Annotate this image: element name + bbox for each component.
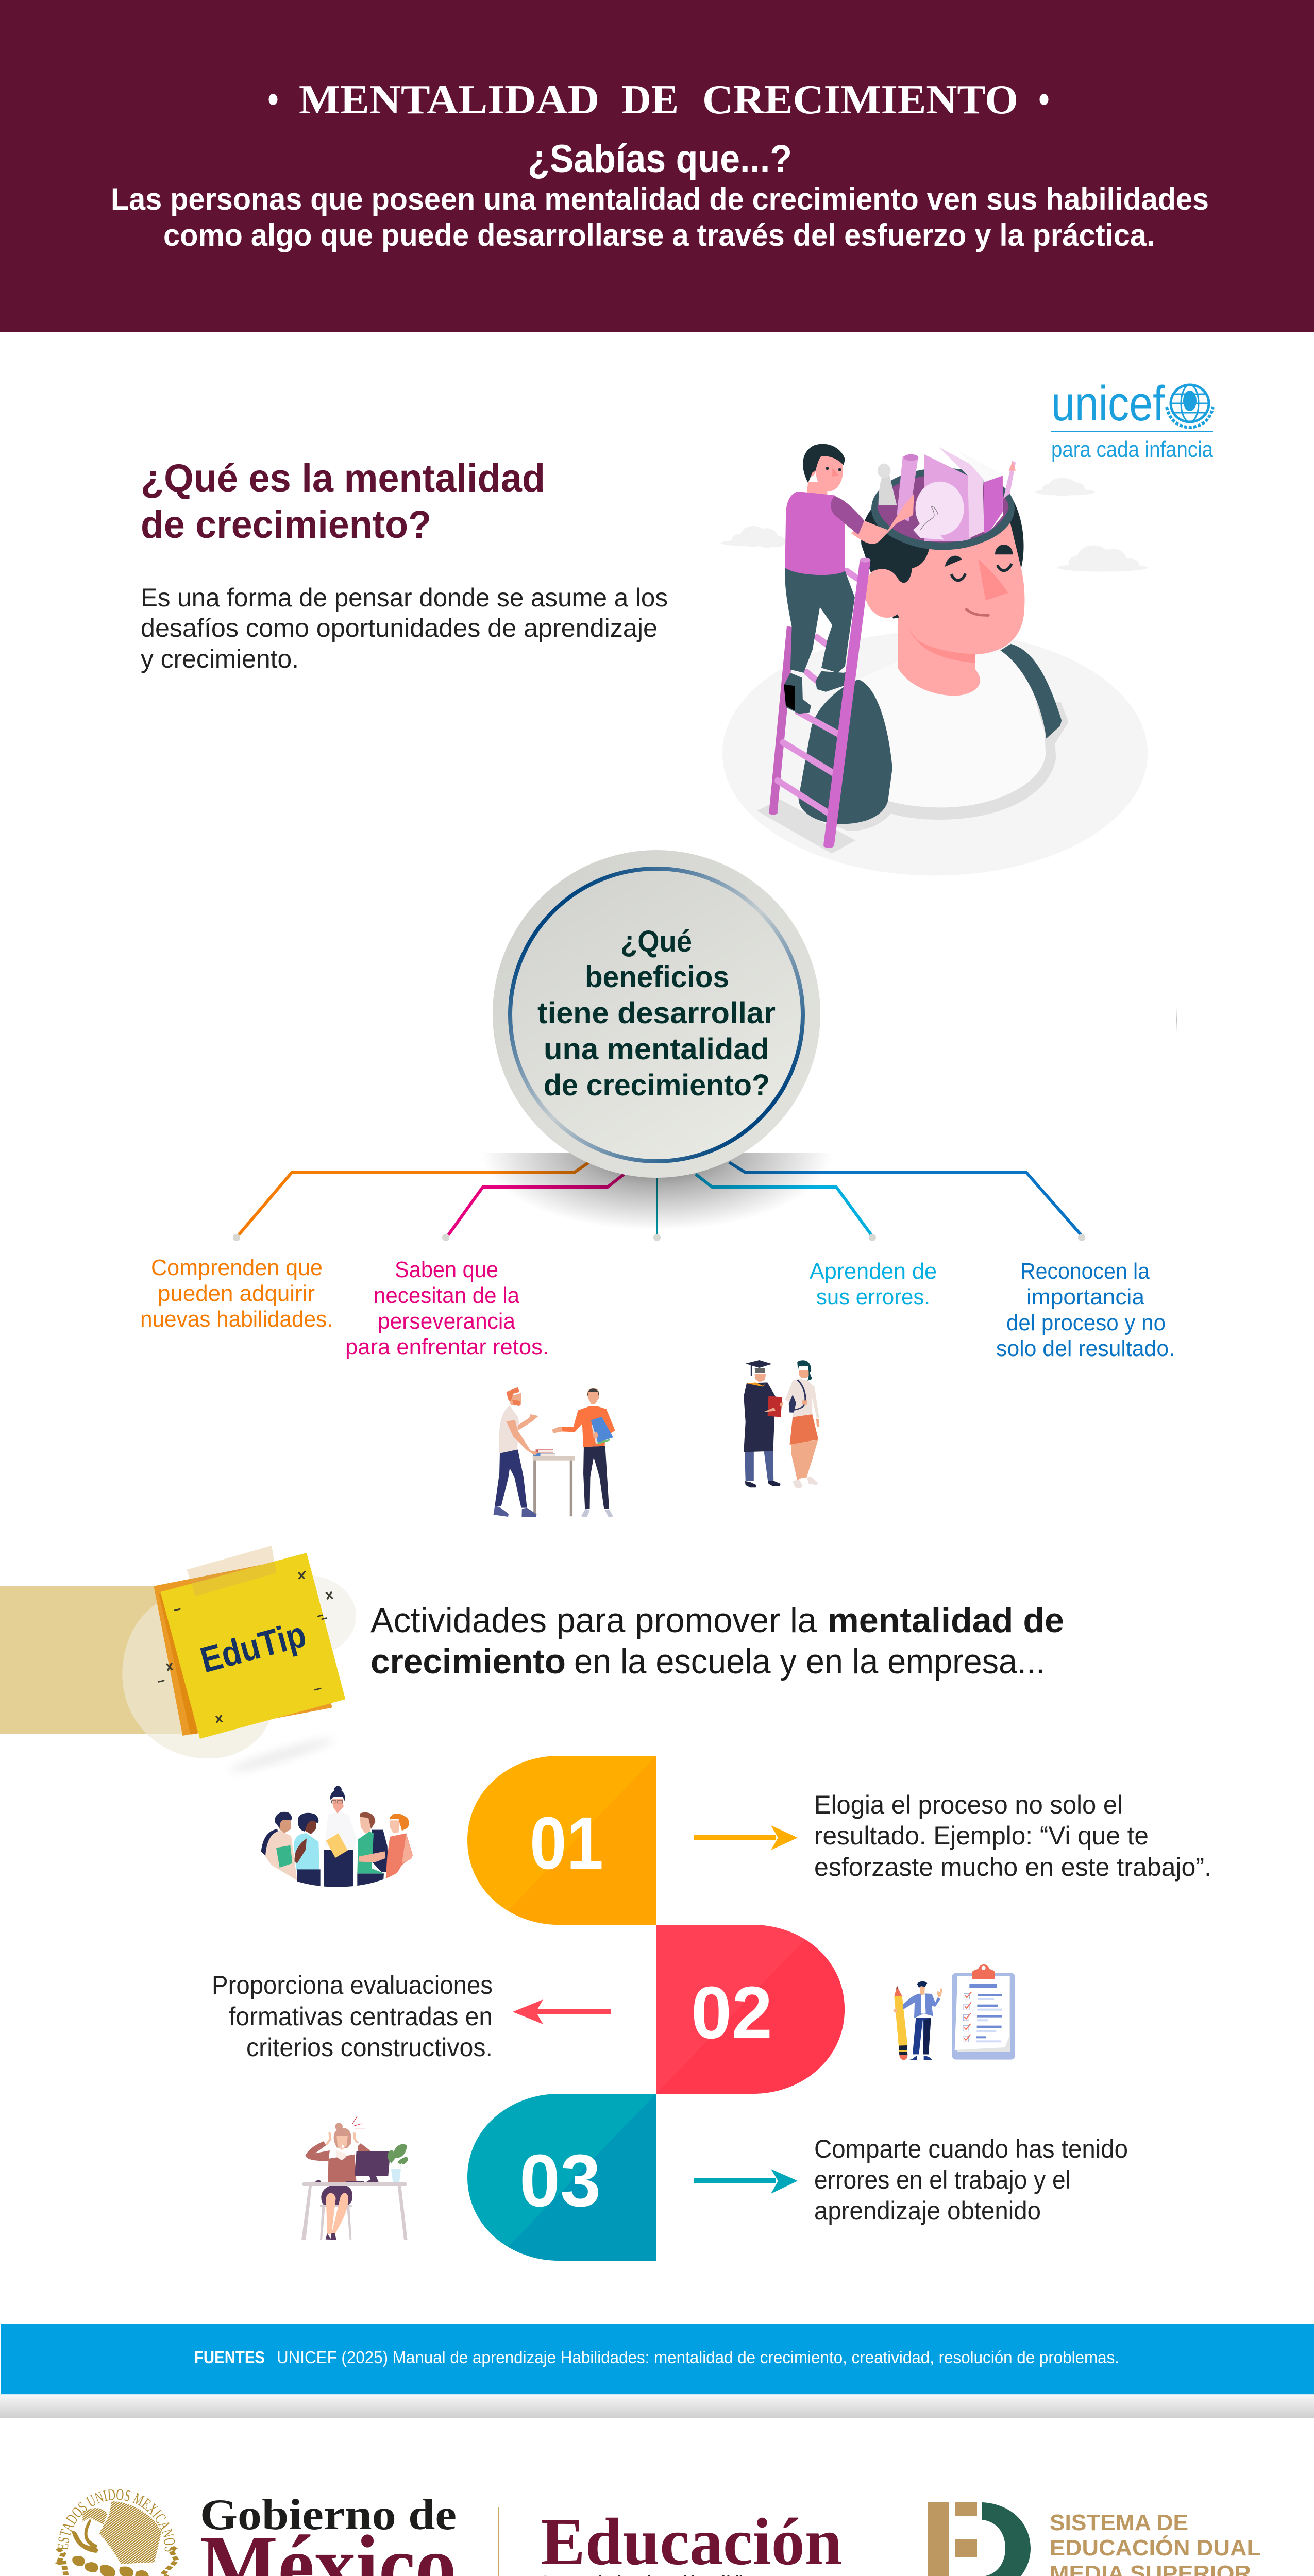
step 2 text: Proporciona evaluaciones (212, 1971, 493, 1999)
benefit 1: Comprenden que (151, 1255, 323, 1280)
benefit 3: sus errores. (816, 1284, 930, 1310)
logo: Sistema de Educación Dual (928, 2502, 1261, 2576)
central disc with question: ¿Qué (620, 925, 692, 958)
disc shadow (482, 1153, 832, 1230)
step 3 text: Comparte cuando has tenido (814, 2134, 1128, 2163)
benefit 3 (810, 1259, 937, 1310)
title: • (1038, 77, 1050, 123)
header band (0, 0, 1314, 332)
step 3 arrow (694, 2169, 798, 2194)
intro text (111, 182, 1209, 252)
central disc with question: beneficios (585, 960, 729, 994)
benefit 4: solo del resultado. (996, 1336, 1175, 1361)
benefit 1: pueden adquirir (158, 1281, 315, 1306)
step 3 text: errores en el trabajo y el (814, 2165, 1071, 2194)
definition text: Es una forma de pensar donde se asume a los (141, 583, 668, 612)
unicef logo (1051, 376, 1213, 462)
note sticker (122, 1546, 356, 1758)
step 1 text (814, 1790, 1211, 1882)
panel: EduTip (0, 1546, 356, 1775)
step 2 text: formativas centradas en (229, 2002, 493, 2031)
small divider mark (1176, 1006, 1177, 1033)
label: EduTip: EduTip (196, 1614, 310, 1680)
wordmark: Gobierno de (200, 2490, 457, 2539)
intro text: como algo que puede desarrollarse a través del esfuerzo y la práctica. (163, 218, 1155, 252)
illustration: graduate and student (744, 1360, 819, 1488)
step 2 arrow (513, 1999, 611, 2024)
heading: what is growth mindset (141, 456, 545, 547)
icon: unicef globe (1167, 385, 1213, 428)
step 1 badge (467, 1756, 656, 1925)
central disc with question: una mentalidad (544, 1032, 769, 1066)
benefit 1: nuevas habilidades. (140, 1307, 333, 1332)
logo: Gobierno de México (55, 2489, 457, 2576)
heading: activities (370, 1601, 1064, 1681)
step 3 badge: 03 (519, 2139, 601, 2222)
icon: national seal: ESTADOS UNIDOS MEXICANOS (58, 2489, 175, 2551)
unicef logo: unicef (1051, 376, 1165, 431)
step 3 text (814, 2134, 1128, 2225)
illustration: man with pencil and checklist (894, 1964, 1015, 2060)
illustration: stressed woman at desk (301, 2116, 408, 2240)
illustration: two men talking at table (493, 1387, 615, 1517)
unicef logo: para cada infancia (1051, 437, 1213, 462)
panel: benefits diagram (140, 850, 1175, 1361)
benefit 4: del proceso y no (1006, 1310, 1166, 1335)
step 1 badge: 01 (530, 1802, 603, 1885)
band (0, 1586, 186, 1734)
subtitle: ¿Sabías que...? (528, 137, 792, 181)
step 1 text: esforzaste mucho en este trabajo”. (814, 1853, 1211, 1882)
definition text: y crecimiento. (141, 645, 299, 673)
illustration: teacher with students (261, 1786, 413, 1891)
heading: activities: en la escuela y en la empresa... (574, 1642, 1045, 1681)
heading: activities: crecimiento (370, 1642, 566, 1681)
heading: what is growth mindset: ¿Qué es la mentalidad (141, 456, 545, 500)
illustration: person on ladder filling a head with ideas (721, 444, 1148, 875)
logos divider (498, 2507, 499, 2576)
benefit 4: Reconocen la (1020, 1259, 1150, 1284)
heading: activities: Actividades para promover la (370, 1601, 817, 1640)
intro text: Las personas que poseen una mentalidad de crecimiento ven sus habilidades (111, 182, 1209, 216)
logo: Sistema de Educación Dual: SISTEMA DE (1050, 2510, 1188, 2535)
title: MENTALIDAD (299, 77, 599, 123)
benefit 2: para enfrentar retos. (345, 1334, 549, 1360)
benefit 3: Aprenden de (810, 1259, 937, 1284)
central disc with question: tiene desarrollar (537, 996, 776, 1030)
step 1 arrow (694, 1825, 798, 1850)
benefit 1 (140, 1255, 333, 1332)
title: CRECIMIENTO (702, 77, 1018, 123)
title (267, 77, 1050, 123)
step 2 badge: 02 (691, 1971, 772, 2054)
definition text (141, 583, 668, 673)
title: • (267, 77, 279, 123)
heading: activities: mentalidad de (828, 1601, 1064, 1640)
title: DE (621, 77, 679, 123)
connector lines (239, 1162, 1081, 1235)
benefit 2: perseverancia (378, 1309, 516, 1334)
step 3 badge (467, 2094, 656, 2261)
sources text: UNICEF (2025) Manual de aprendizaje Habilidades: mentalidad de crecimiento, creatividad, resolución de problemas. (277, 2348, 1119, 2367)
benefit 2: Saben que (395, 1257, 498, 1282)
logo: Sistema de Educación Dual: EDUCACIÓN DUAL (1050, 2535, 1261, 2561)
step 2 text: criterios constructivos. (246, 2033, 493, 2062)
heading: what is growth mindset: de crecimiento? (141, 503, 431, 547)
benefit 4: importancia (1026, 1284, 1145, 1310)
sources bar (0, 2324, 1314, 2418)
sources text: FUENTES (194, 2348, 265, 2367)
step 1 text: resultado. Ejemplo: “Vi que te (814, 1821, 1149, 1850)
benefit 2 (345, 1257, 549, 1360)
step 2 badge (656, 1925, 845, 2094)
benefit 2: necesitan de la (374, 1283, 519, 1308)
step 3 text: aprendizaje obtenido (814, 2196, 1041, 2225)
central disc with question: de crecimiento? (544, 1069, 770, 1102)
benefit 4 (996, 1259, 1175, 1361)
central disc with question (493, 850, 820, 1178)
definition text: desafíos como oportunidades de aprendizaje (141, 614, 658, 642)
step 1 text: Elogia el proceso no solo el (814, 1790, 1123, 1819)
connector end dots (233, 1234, 1085, 1241)
step 2 text (212, 1971, 493, 2062)
